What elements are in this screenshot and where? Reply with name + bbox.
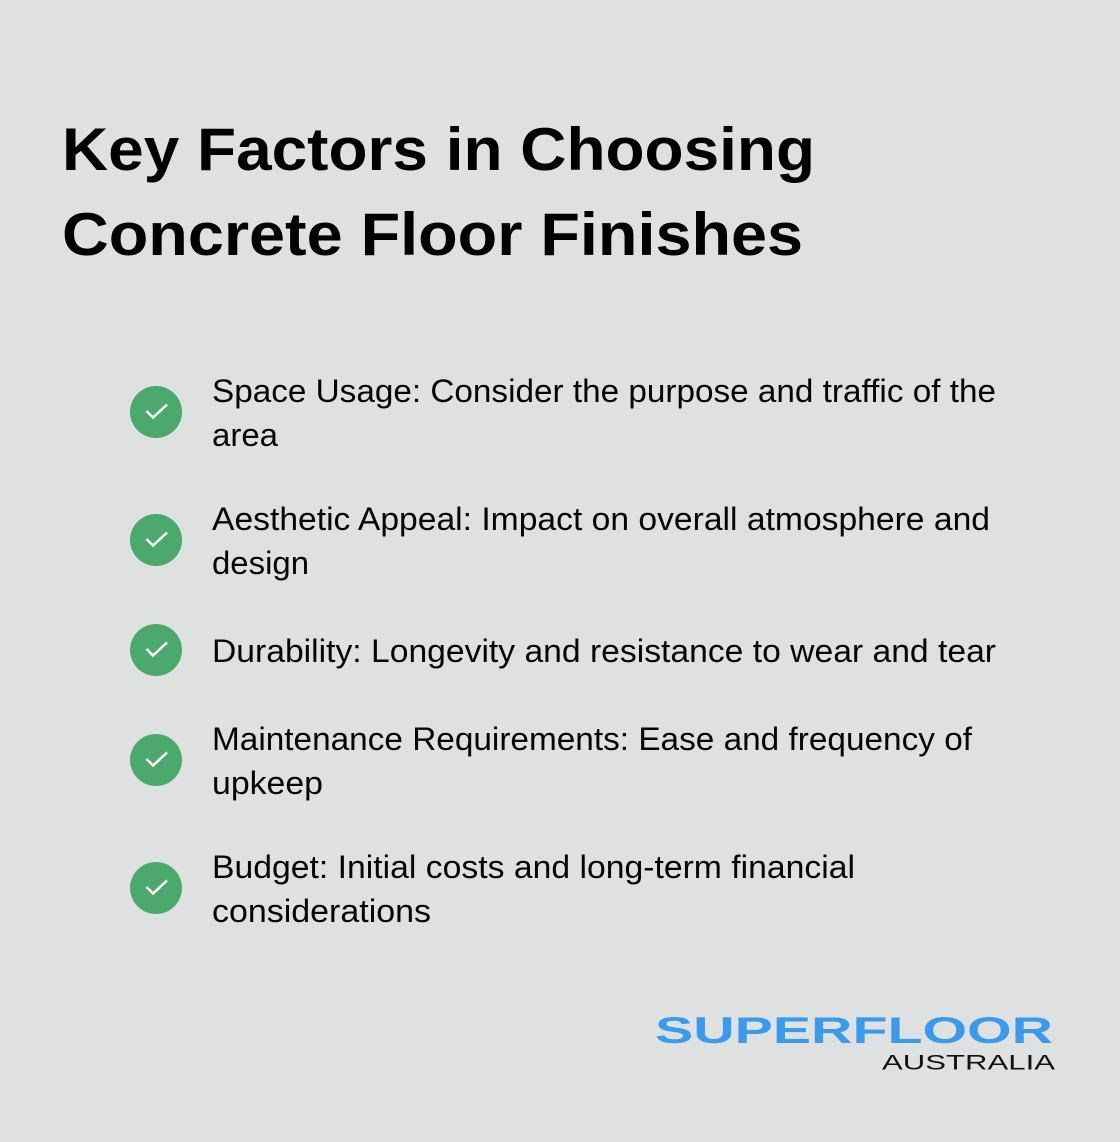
title: Concrete Floor Finishes bbox=[62, 201, 803, 268]
item: aesthetic appeal: design bbox=[212, 545, 309, 581]
item: space usage bbox=[130, 373, 996, 453]
logo bbox=[655, 1010, 1056, 1074]
item: maintenance requirements: Maintenance Requirements: Ease and frequency of bbox=[212, 721, 972, 757]
checklist bbox=[130, 373, 996, 929]
item: durability bbox=[130, 624, 996, 676]
item: budget: Budget: Initial costs and long-term financial bbox=[212, 849, 855, 885]
item: space usage: area bbox=[212, 417, 278, 453]
item: budget bbox=[130, 849, 855, 929]
item: space usage: Space Usage: Consider the purpose and traffic of the bbox=[212, 373, 996, 409]
item: maintenance requirements: upkeep bbox=[212, 765, 323, 801]
item: durability: Durability: Longevity and resistance to wear and tear bbox=[212, 633, 996, 669]
item: maintenance requirements bbox=[130, 721, 972, 801]
item: aesthetic appeal bbox=[130, 501, 990, 581]
logo: AUSTRALIA bbox=[882, 1050, 1056, 1074]
item: budget: considerations bbox=[212, 893, 431, 929]
logo: SUPERFLOOR bbox=[655, 1010, 1053, 1051]
title bbox=[62, 116, 815, 268]
item: aesthetic appeal: Aesthetic Appeal: Impact on overall atmosphere and bbox=[212, 501, 990, 537]
title: Key Factors in Choosing bbox=[62, 116, 815, 183]
